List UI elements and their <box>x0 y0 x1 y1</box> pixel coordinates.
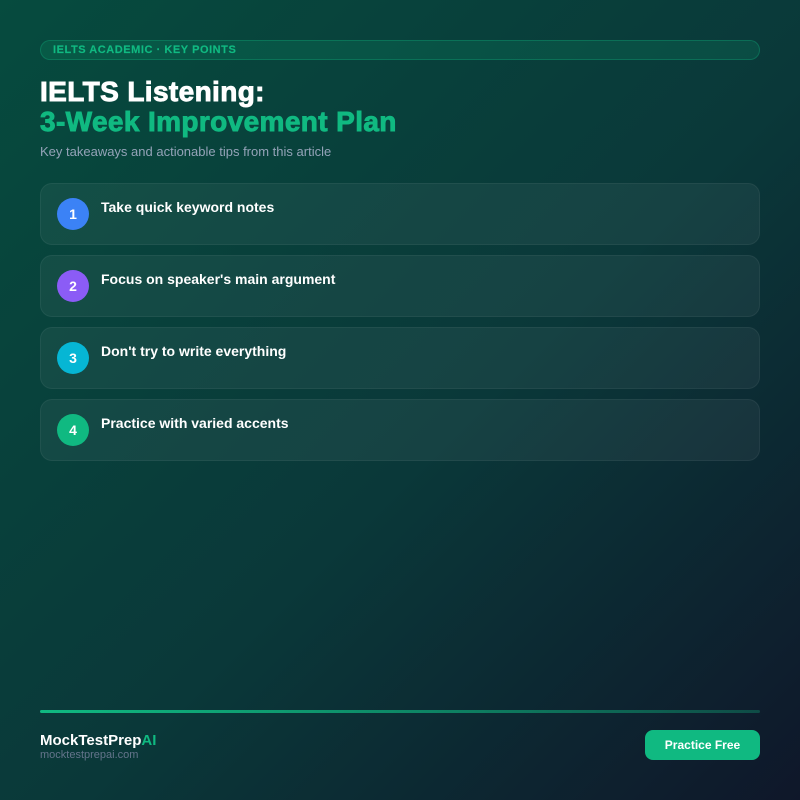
brand name: MockTestPrepAI <box>40 732 156 749</box>
title line 2: 3-Week Improvement Plan <box>40 106 397 137</box>
call to action button <box>645 730 760 760</box>
point 3 text: Don't try to write everything <box>101 343 286 359</box>
point 2 text: Focus on speaker's main argument <box>101 271 335 287</box>
number badge 4: 4 <box>69 422 77 438</box>
panel: point 3 <box>40 327 760 389</box>
panel: point 1 <box>40 183 760 245</box>
panel: point 2 <box>40 255 760 317</box>
call to action button: Practice Free <box>665 738 740 752</box>
brand url: mocktestprepai.com <box>40 749 138 761</box>
number badge 1 <box>57 198 89 230</box>
number badge 4 <box>57 414 89 446</box>
number badge 1: 1 <box>69 206 77 222</box>
category badge: IELTS ACADEMIC · KEY POINTS <box>53 44 236 56</box>
number badge 3 <box>57 342 89 374</box>
subtitle: Key takeaways and actionable tips from this article <box>40 144 331 159</box>
brand block <box>40 732 156 761</box>
panel: point 4 <box>40 399 760 461</box>
point 1 text: Take quick keyword notes <box>101 199 274 215</box>
title line 1: IELTS Listening: <box>40 76 265 107</box>
point 4 text: Practice with varied accents <box>101 415 289 431</box>
category badge <box>40 40 760 60</box>
number badge 3: 3 <box>69 350 77 366</box>
number badge 2: 2 <box>69 278 77 294</box>
number badge 2 <box>57 270 89 302</box>
